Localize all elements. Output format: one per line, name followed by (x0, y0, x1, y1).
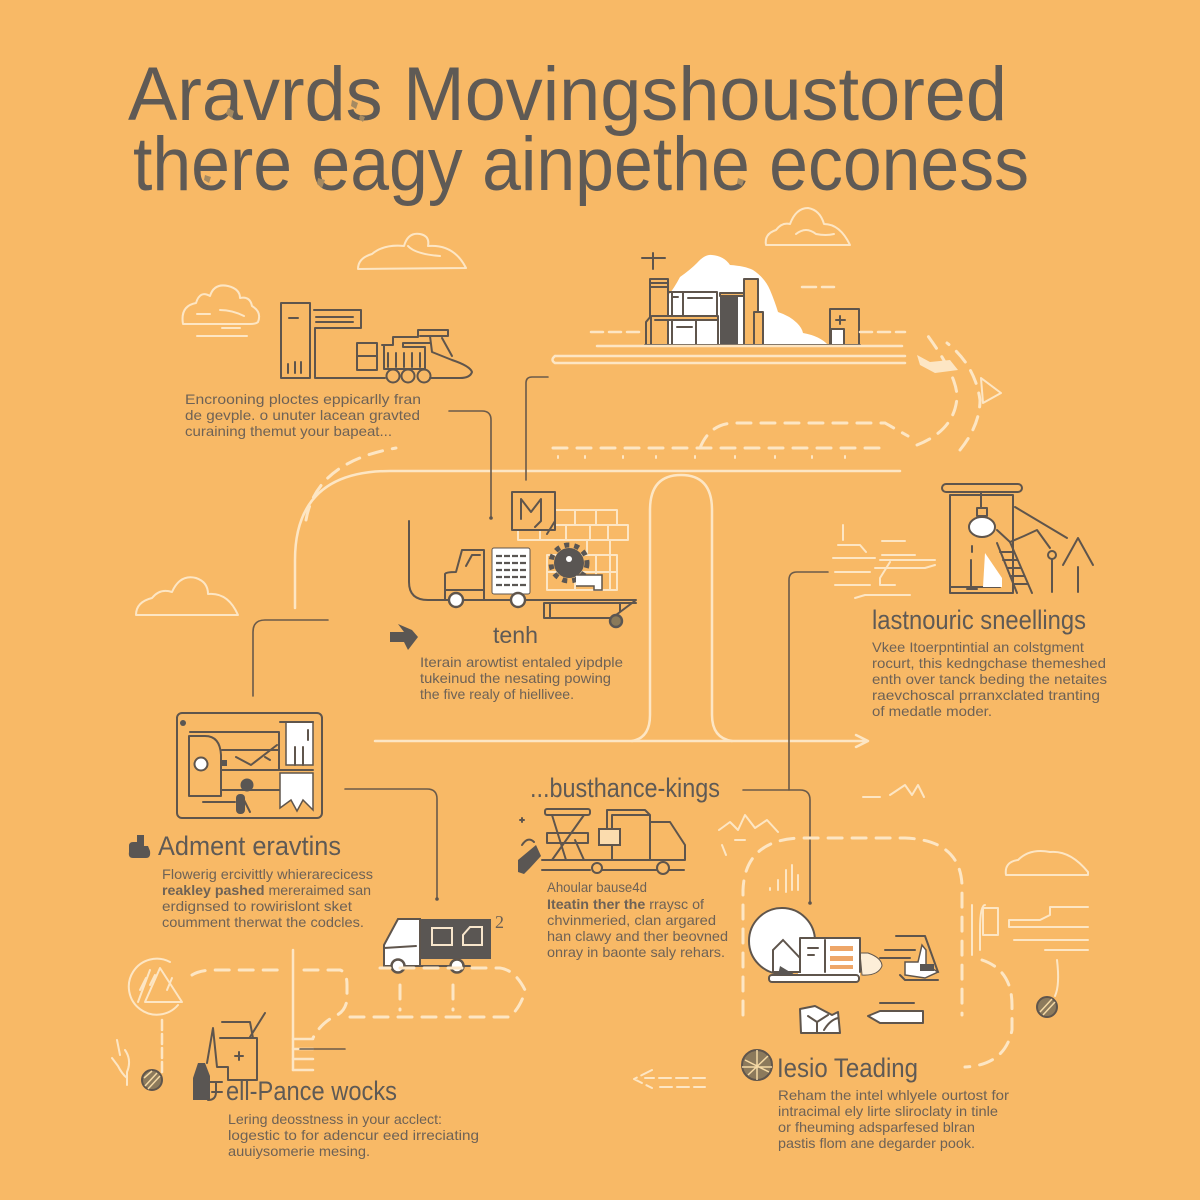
title (128, 52, 1029, 207)
connector: lower left (300, 1048, 345, 1050)
icon: round textured (742, 1050, 772, 1080)
text block: middle (547, 879, 728, 960)
text block: top left (185, 391, 421, 439)
icon: dark box truck (384, 919, 491, 972)
connector: left panel to truck (345, 789, 439, 901)
text block: middle: chvinmeried, clan argared (547, 912, 716, 928)
text block: right: raevchoscal prranxclated tranting (872, 687, 1100, 703)
text block: bottom right: intracimal ely lirte sliroclaty in tinle (778, 1103, 998, 1119)
text block: center: tukeinud the nesating powing (420, 670, 611, 686)
text block: center: Iterain arowtist entaled yipdple (420, 654, 623, 670)
heading: bottom left: ell-Pance wocks (226, 1076, 397, 1106)
text block: middle: Ahoular bause4d (547, 879, 647, 895)
text block: top left: de gevple. o unuter lacean gravted (185, 407, 420, 423)
icon: white cloud and building (642, 253, 860, 346)
icon: box and bottle (193, 1013, 265, 1100)
text block: bottom right: or fheuming adsparfesed blran (778, 1119, 975, 1135)
text block: right: enth over tanck beding the netaites (872, 671, 1107, 687)
heading: bottom right: Iesio Teading (777, 1053, 918, 1083)
cloud: top middle (358, 234, 466, 269)
connector: right text to bottom (743, 572, 828, 905)
text block: bottom left: Lering deosstness in your acclect: (228, 1111, 442, 1127)
text block: bottom left: logestic to for adencur eed irreciating (228, 1127, 479, 1143)
text block: right (872, 639, 1107, 719)
heading: center: tenh (493, 622, 538, 648)
cloud: top right (766, 208, 850, 245)
cloud: left (136, 577, 238, 615)
connector: top left to center (449, 411, 493, 520)
text block: center (420, 654, 623, 702)
text block: top left: Encrooning ploctes eppicarlly fran (185, 391, 421, 407)
text block: left: erdignsed to rowirislont sket (162, 898, 352, 914)
text block: bottom right (778, 1087, 1009, 1151)
text block: bottom left (228, 1111, 479, 1159)
connector: building to center (526, 377, 548, 480)
text block: center: the five realy of hiellivee. (420, 686, 574, 702)
white decorations: birds and zigzag (719, 785, 924, 855)
text block: middle: han clawy and ther beovned (547, 928, 728, 944)
text block: left: coumment therwat the codcles. (162, 914, 364, 930)
text block: left (162, 866, 373, 930)
icon: striped ball left (142, 1070, 162, 1090)
text block: right: rocurt, this kedngchase themeshed (872, 655, 1106, 671)
cloud: upper left (183, 285, 259, 336)
text block: bottom right: Reham the intel whlyele ourtost for (778, 1087, 1009, 1103)
text block: right: Vkee Itoerpntintial an colstgment (872, 639, 1084, 655)
connector: left panel up (253, 620, 328, 696)
heading: right: lastnouric sneellings (872, 605, 1086, 635)
dashed lower road (112, 950, 525, 1085)
main road network (295, 332, 1001, 747)
icon: framed panel (177, 713, 322, 818)
icon: lift and van (518, 809, 685, 874)
icon: server and dump truck (281, 303, 472, 382)
icon: crane tower and ladder (942, 484, 1093, 593)
text block: left: reakley pashed mereraimed san (162, 882, 371, 898)
icon: central truck with bricks and gear (409, 492, 636, 627)
road lines under building (552, 287, 905, 363)
text block: middle: Iteatin ther the rraysc of (547, 896, 704, 912)
number 2: 2 (495, 912, 504, 932)
text block: right: of medatle moder. (872, 703, 992, 719)
text block: top left: curaining themut your bapeat... (185, 423, 392, 439)
dashed loop: bottom right (743, 838, 1088, 1067)
heading: left: Adment eravtins (158, 831, 341, 861)
title: there eagy ainpethe econess (133, 122, 1029, 207)
icon: dark download (129, 835, 150, 858)
icon: dark arrow (390, 624, 418, 650)
text block: bottom left: auuiysomerie mesing. (228, 1143, 370, 1159)
arrow: dashed left (634, 1070, 705, 1088)
icon: machine and circle (749, 908, 938, 1033)
heading: middle: ...busthance-kings (530, 773, 720, 803)
text block: middle: onray in baonte saly rehars. (547, 944, 725, 960)
cloud: bottom right (1006, 851, 1088, 875)
title: Aravrds Movingshoustored (128, 52, 1007, 137)
icon: striped ball right (1037, 997, 1057, 1017)
white decorative sketch: right (833, 525, 935, 598)
text block: bottom right: pastis flom ane degarder pook. (778, 1135, 975, 1151)
icon: mountain circle (129, 959, 182, 1015)
text block: left: Flowerig ercivittly whierarecicess (162, 866, 373, 882)
